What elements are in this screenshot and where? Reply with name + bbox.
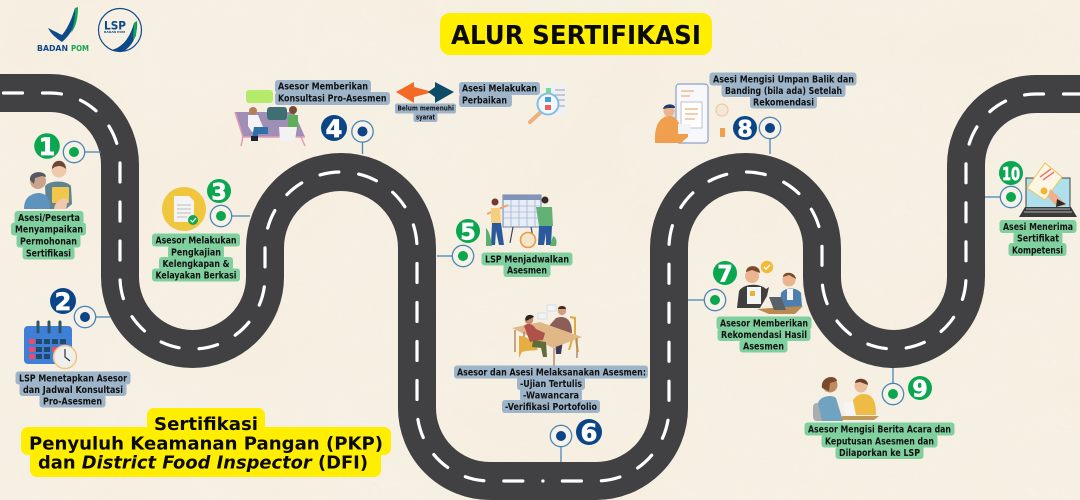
step 8 marker: 8: [737, 118, 753, 142]
step 8 marker: [733, 116, 781, 154]
label: belum memenuhi syarat: syarat: [416, 114, 435, 122]
label: step 8: [710, 72, 856, 108]
arrows: back and forth: [396, 82, 454, 103]
step 5 marker: [437, 219, 480, 267]
icon: consultation on sofa: [235, 90, 305, 146]
label: step 8: Asesi Mengisi Umpan Balik dan: [713, 74, 854, 85]
label: step 3: Pengkajian: [171, 247, 221, 258]
label: step 1: Sertifikasi: [26, 248, 71, 259]
step 2 marker: 2: [55, 288, 71, 316]
label: perbaikan: [459, 82, 540, 107]
label: step 10: Kompetensi: [1012, 245, 1063, 256]
label: step 5: [482, 252, 572, 277]
label: step 2: Pro-Asesmen: [43, 396, 102, 407]
road: [0, 93, 1080, 481]
step 7 marker: 7: [717, 262, 733, 288]
subtitle: dan District Food Inspector (DFI): [38, 452, 368, 474]
label: step 8: Banding (bila ada) Setelah: [725, 86, 842, 97]
icon: signing report: [813, 377, 879, 421]
step 5 marker: 5: [460, 220, 476, 246]
icon: applicant and officer: [24, 161, 72, 209]
step 1 marker: [34, 133, 101, 163]
label: step 7: Asesmen: [743, 341, 784, 352]
step 6 marker: 6: [581, 419, 597, 447]
label: step 1: Permohonan: [20, 236, 77, 247]
icon: recommendation meeting: [737, 261, 803, 314]
label: step 3: [152, 234, 240, 282]
logo: LSP Badan POM: BADAN POM: [104, 30, 125, 34]
label: step 5: LSP Menjadwalkan: [485, 254, 569, 265]
label: step 6: -Verifikasi Portofolio: [505, 402, 597, 413]
step 2 marker: [50, 288, 110, 328]
label: step 2: LSP Menetapkan Asesor: [19, 373, 127, 384]
label: belum memenuhi syarat: Belum memenuhi: [398, 105, 454, 113]
label: step 9: Asesor Mengisi Berita Acara dan: [808, 424, 951, 435]
icon: certificate from laptop: [1019, 163, 1077, 217]
step 6 marker: [550, 419, 602, 462]
label: step 5: Asesmen: [507, 265, 547, 276]
label: step 9: Dilaporkan ke LSP: [839, 448, 920, 459]
step 3 marker: [207, 179, 250, 227]
label: step 3: Asesor Melakukan: [156, 235, 236, 246]
logo: LSP Badan POM: [98, 8, 142, 52]
step 7 marker: [688, 261, 737, 311]
icon: document check: [162, 187, 206, 231]
icon: magnifier checklist: [530, 84, 567, 122]
label: step 1: Asesi/Peserta: [18, 213, 80, 224]
subtitle: Sertifikasi: [154, 414, 258, 435]
label: step 4: Konsultasi Pro-Asesmen: [278, 93, 386, 104]
label: step 7: Asesor Memberikan: [720, 318, 808, 329]
subtitle: Penyuluh Keamanan Pangan (PKP): [29, 434, 383, 454]
label: step 6: -Wawancara: [523, 390, 579, 401]
label: step 7: [716, 316, 812, 352]
title: [440, 13, 712, 55]
step 3 marker: 3: [211, 180, 227, 206]
step 9 marker: [882, 368, 932, 405]
label: step 4: Asesor Memberikan: [278, 81, 368, 92]
step 1 marker: 1: [39, 133, 55, 161]
label: step 10: [1000, 220, 1076, 256]
label: step 8: Rekomendasi: [753, 97, 814, 108]
icon: calendar and clock: [24, 322, 76, 368]
label: step 1: [11, 211, 86, 260]
label: step 7: Rekomendasi Hasil: [721, 330, 807, 341]
logo: LSP Badan POM: LSP: [104, 18, 126, 32]
label: perbaikan: Perbaikan: [462, 95, 507, 106]
label: perbaikan: Asesi Melakukan: [462, 83, 537, 94]
label: step 9: Keputusan Asesmen dan: [825, 436, 934, 447]
step 4 marker: [321, 115, 373, 154]
label: step 1: Menyampaikan: [15, 224, 83, 235]
step 9 marker: 9: [912, 378, 928, 402]
label: step 10: Sertifikat: [1017, 233, 1059, 244]
label: belum memenuhi syarat: [395, 104, 456, 122]
label: step 4: [275, 80, 390, 105]
label: step 6: [454, 366, 648, 413]
icon: phone feedback form: [655, 84, 728, 143]
label: step 2: [16, 372, 130, 408]
label: step 3: Kelengkapan &: [162, 259, 230, 270]
step 4 marker: 4: [326, 115, 342, 143]
title: ALUR SERTIFIKASI: [451, 21, 701, 51]
icon: scheduling board: [486, 195, 557, 248]
label: step 6: -Ujian Tertulis: [520, 379, 582, 390]
step 10 marker: 10: [1002, 164, 1020, 185]
logo: Badan POM: [37, 7, 89, 53]
label: step 2: dan Jadwal Konsultasi: [23, 385, 123, 396]
label: step 3: Kelayakan Berkasi: [156, 270, 236, 281]
icon: assessor and candidate at table: [512, 305, 582, 367]
step 10 marker: [985, 161, 1023, 208]
label: step 9: [804, 422, 954, 459]
subtitle: [21, 408, 391, 477]
label: step 6: Asesor dan Asesi Melaksanakan Asesmen:: [457, 367, 646, 378]
logo: Badan POM: POM: [71, 44, 89, 53]
logo: Badan POM: BADAN: [37, 44, 68, 53]
